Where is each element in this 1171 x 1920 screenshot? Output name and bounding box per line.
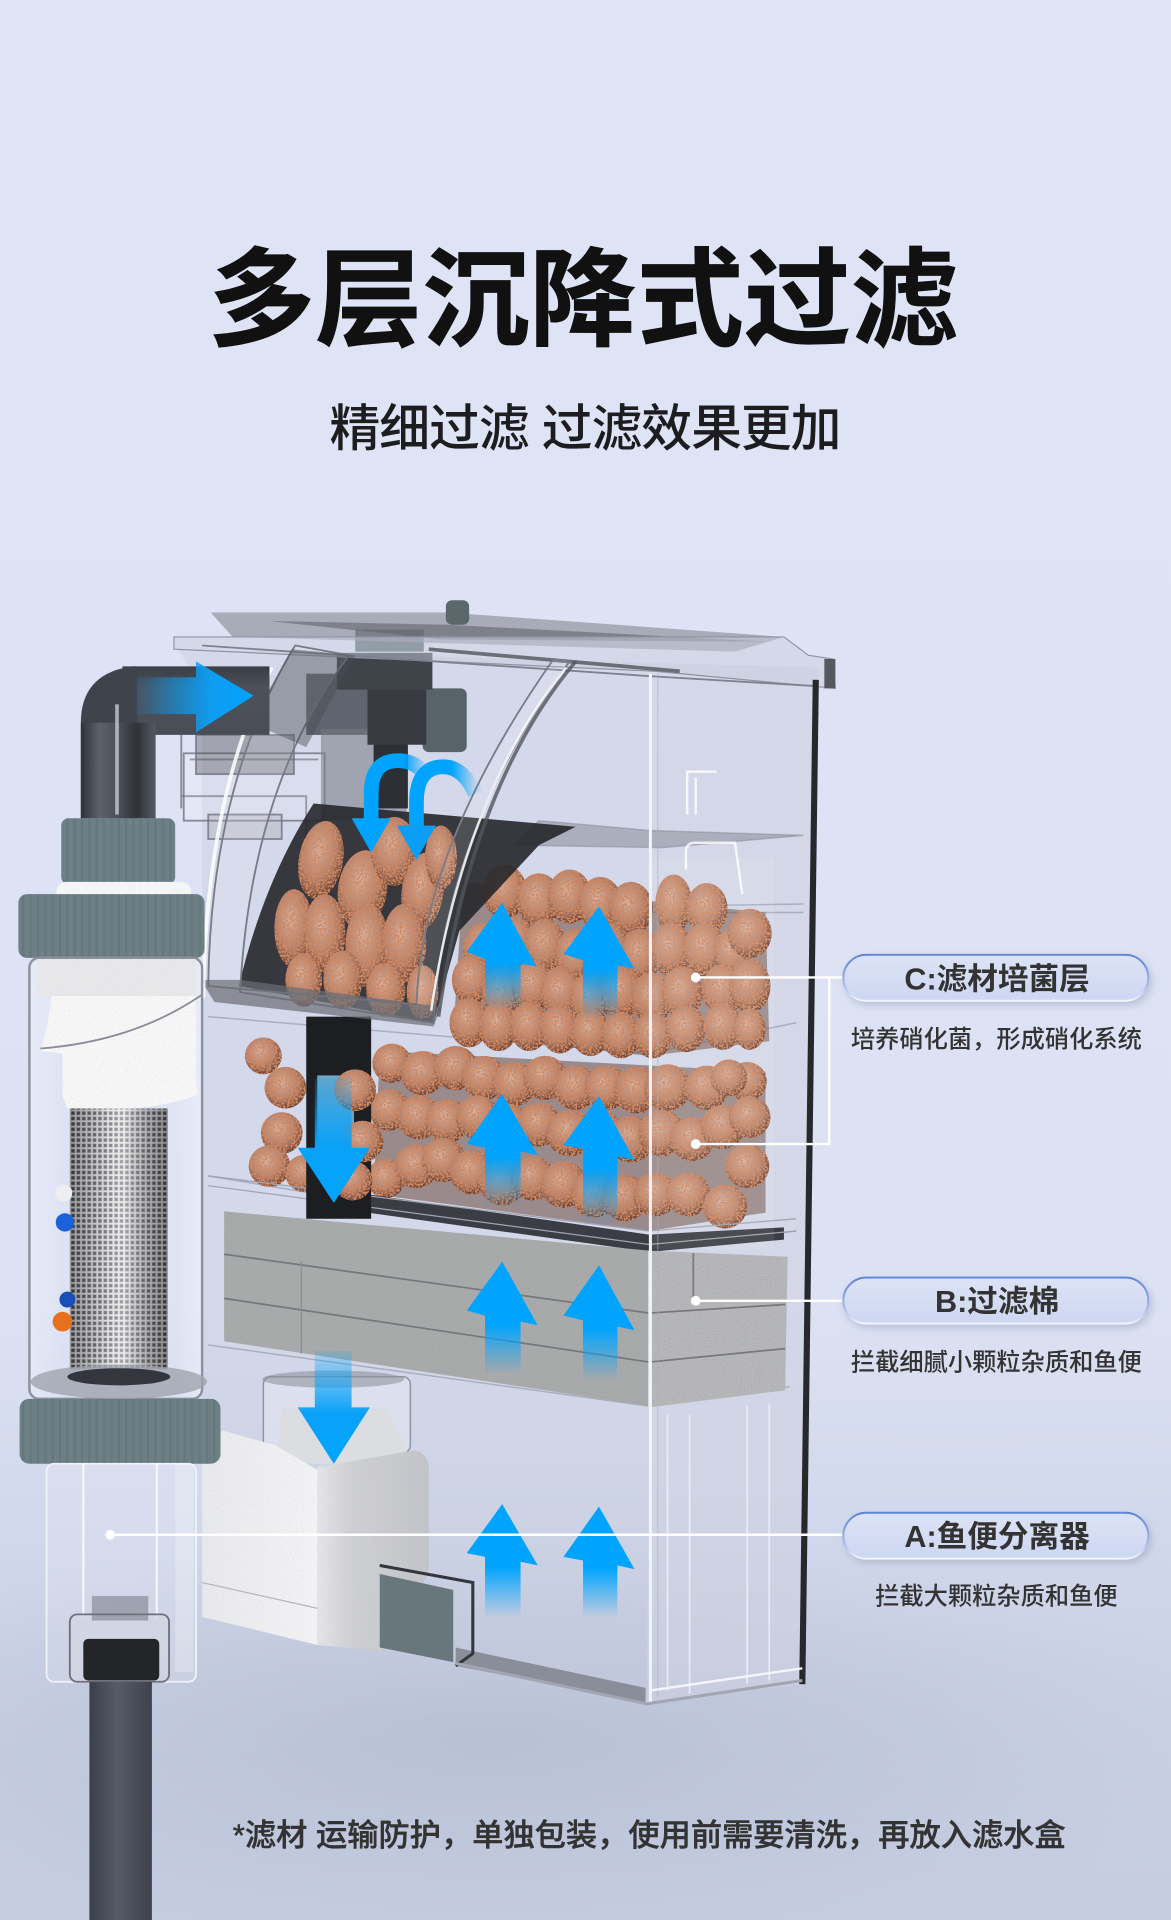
- canister filter assembly: [18, 666, 269, 1920]
- pill C: [843, 955, 1148, 1001]
- upper union nut: [61, 818, 175, 884]
- arrow: middle up left: [467, 1094, 538, 1208]
- chamber glass shell: [208, 646, 570, 1023]
- arrow: column down: [298, 1078, 370, 1203]
- tank corner and edges: [456, 674, 816, 1704]
- mesh cylinder: [70, 1109, 168, 1369]
- arrow: foam up right: [563, 1265, 634, 1380]
- subtitle: 精细过滤 过滤效果更加: [330, 400, 841, 457]
- wire mesh tray: [208, 1176, 796, 1252]
- lower clear tube: [47, 1464, 196, 1682]
- tank right glass face: [647, 671, 813, 1703]
- arrow: inlet right: [132, 661, 254, 732]
- label C: C:滤材培菌层: [904, 963, 1090, 997]
- tank back glass: [178, 649, 818, 1703]
- description B: 拦截细腻小颗粒杂质和鱼便: [851, 1350, 1142, 1377]
- arrow: foam up left: [467, 1262, 538, 1374]
- top lid plate: [211, 600, 784, 652]
- description C: 培养硝化菌，形成硝化系统: [851, 1026, 1142, 1053]
- inlet elbow pipe: [81, 666, 269, 818]
- debris balls: [53, 1184, 75, 1331]
- lower connector: [70, 1596, 169, 1682]
- curved inlet chamber: [201, 646, 576, 1026]
- title: 多层沉降式过滤: [208, 241, 958, 360]
- back frame detail left: [181, 686, 325, 845]
- main cap: [18, 894, 205, 958]
- callout C: [843, 955, 1148, 1053]
- label B: B:过滤棉: [935, 1285, 1059, 1319]
- arrow: C layer up left: [467, 903, 537, 1011]
- white seal ring: [56, 882, 191, 902]
- chamber glass floor: [201, 980, 441, 1026]
- callout A: [843, 1513, 1148, 1611]
- arrow: C layer up right: [563, 906, 634, 1019]
- lid rim: [174, 637, 835, 688]
- lower media backing: [374, 1051, 766, 1231]
- arrow: middle up right: [563, 1096, 634, 1225]
- label A: A:鱼便分离器: [904, 1520, 1090, 1554]
- lower media balls: [245, 1037, 770, 1229]
- callout B: [843, 1278, 1148, 1377]
- callout leader lines: [105, 973, 843, 1540]
- dark downflow column: [306, 1017, 371, 1219]
- pump assembly: [306, 630, 467, 821]
- chamber media balls: [274, 817, 457, 1019]
- arrow: u-turn left: [352, 761, 426, 853]
- arrow: bottom up left: [467, 1504, 538, 1618]
- arrow: u-turn right: [397, 767, 475, 860]
- upper right media balls: [450, 865, 772, 1058]
- tank back ledge shelves: [208, 821, 804, 1406]
- pill B: [843, 1278, 1148, 1323]
- footnote: *滤材 运输防护，单独包装，使用前需要清洗，再放入滤水盒: [233, 1818, 1066, 1853]
- tube base ring: [31, 1365, 207, 1399]
- pill A: [843, 1513, 1148, 1559]
- upper media backing: [453, 882, 769, 1056]
- chamber top dark glass: [251, 649, 355, 747]
- white sponge: [37, 959, 198, 1109]
- flow arrows: [132, 661, 634, 1618]
- arrow: bottom up right: [563, 1507, 634, 1618]
- column-front balls: [333, 1069, 383, 1200]
- cup top cylinder: [262, 1371, 410, 1464]
- foam filter block: [224, 1211, 788, 1407]
- clear tube body: [29, 958, 202, 1399]
- separator white block: [202, 1431, 429, 1651]
- separator cup: [202, 1371, 429, 1651]
- description A: 拦截大颗粒杂质和鱼便: [875, 1584, 1118, 1611]
- bottom channel and switch: [380, 1565, 646, 1703]
- spiral band: [40, 995, 202, 1048]
- arrow: foam down: [298, 1351, 370, 1464]
- tank right columns: [668, 1404, 769, 1694]
- right glass veil: [652, 857, 774, 1249]
- product: filter tank: [174, 600, 835, 1704]
- lower union nut: [20, 1399, 220, 1464]
- drain pipe: [89, 1682, 152, 1920]
- right side clear handle: [686, 772, 742, 894]
- chamber dark interior: [239, 804, 576, 1023]
